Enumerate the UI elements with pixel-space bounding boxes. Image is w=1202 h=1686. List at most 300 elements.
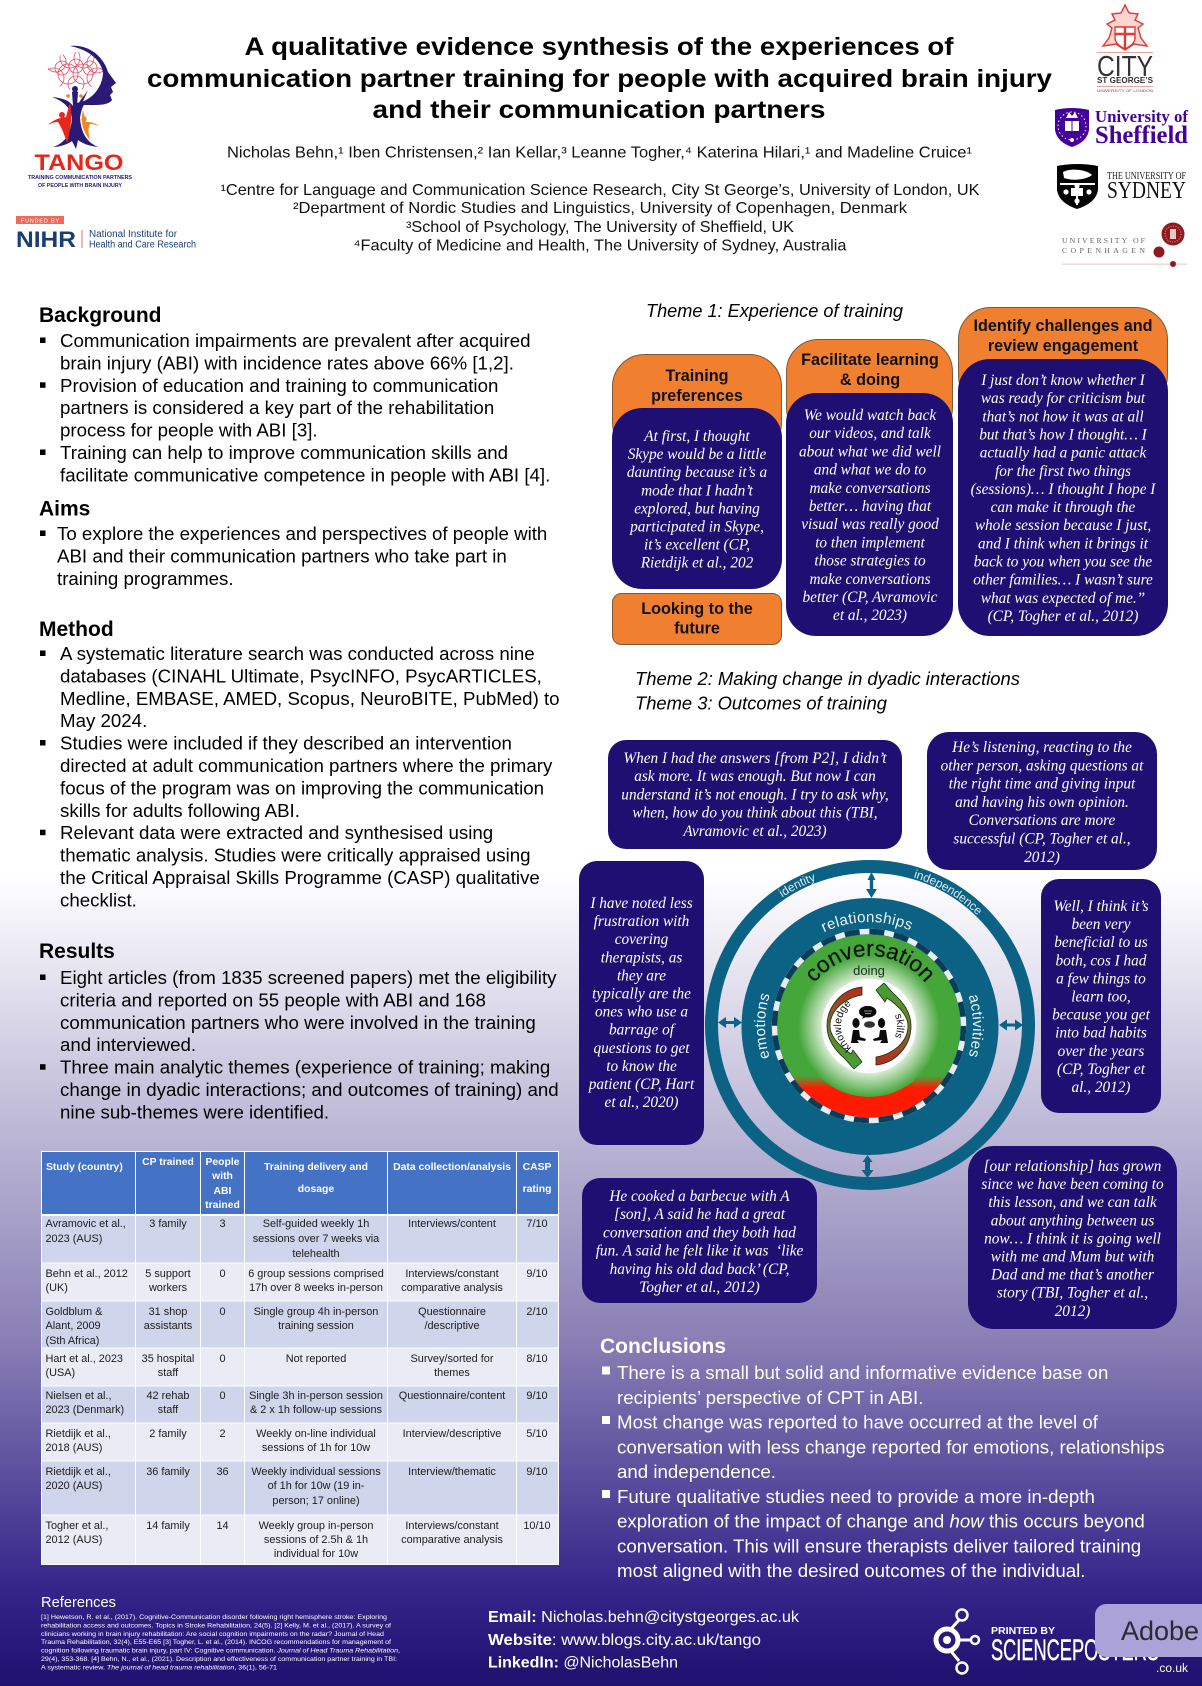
table row: Rietdijk 2020 (46, 1466, 548, 1507)
panel: training preferences: Rietdijk et al., 202 (640, 555, 754, 572)
quote: Togher CP beneficial: (CP, Togher et (1057, 1061, 1146, 1078)
table row: Avramovic: 3 (219, 1218, 226, 1230)
text block: results bullets: Three main analytic themes (experience of training; making (60, 1057, 550, 1078)
middle ring labels: relationships (822, 912, 912, 932)
table row: Behn: (UK) (46, 1282, 68, 1294)
text block: conclusions bullets: There is a small but solid and informative evidence base on (617, 1362, 1108, 1383)
logo: Science Posters: PRINTED BY (991, 1625, 1055, 1637)
table row: Rietdijk 2020: person; 17 online) (272, 1495, 360, 1507)
outer ring labels (778, 869, 981, 914)
title (147, 33, 1052, 124)
panel: identify challenges and review engagement: but that’s how I thought… I (979, 426, 1148, 444)
text block: method bullets: the Critical Appraisal Skills Programme (CASP) qualitative (60, 867, 540, 888)
table row: Avramovic: 7/10 (526, 1218, 548, 1230)
panel: training preferences: explored, but having (634, 500, 760, 517)
table row: Togher: individual for 10w (274, 1548, 358, 1560)
table row: Behn: workers (148, 1282, 188, 1294)
quote: Hart CP: patient (CP, Hart (588, 1076, 695, 1093)
table row: Behn: 5 support (145, 1268, 191, 1280)
table row: Hart: 35 hospital (142, 1353, 194, 1365)
references: 29(4), 353-368. [4] Behn, N., et al., (2021). Description and effectiveness of communication partner training in TBI: (41, 1656, 397, 1663)
conversation disc (778, 934, 960, 1118)
panel: identify challenges and review engagement: I just don’t know whether I (980, 372, 1146, 389)
quote: Togher TBI relationship: this lesson, and we can talk (988, 1194, 1158, 1211)
table row: Nielsen: & 2 x 1h follow-up sessions (250, 1404, 383, 1416)
text block: results bullets: change in dyadic interactions; and outcomes of training) and (60, 1079, 559, 1100)
logo: NIHR funding: FUNDED BY (21, 218, 59, 224)
table row: Hart (46, 1353, 548, 1379)
table row: Goldblum: 2/10 (526, 1306, 548, 1318)
text block: background bullets: partners is considered a key part of the rehabilitation (60, 397, 494, 418)
conversation label: conversation (808, 944, 932, 982)
text block: conclusions bullets: and independence. (617, 1461, 776, 1482)
authors: Nicholas Behn,¹ Iben Christensen,² Ian Kellar,³ Leanne Togher,⁴ Katerina Hilari,¹ and Madeline Cruice¹ (227, 144, 972, 162)
table header row: with (211, 1171, 233, 1182)
contact details: Website : www.blogs.city.ac.uk/tango (488, 1632, 761, 1649)
panel: identify challenges and review engagement: (CP, Togher et al., 2012) (988, 608, 1138, 625)
table row: Hart: Survey/sorted for (411, 1353, 494, 1365)
quote: Avramovic TBI: When I had the answers [from P2], I didn’t (623, 750, 887, 767)
text block: results bullets: Eight articles (from 1835 screened papers) met the eligibility (60, 967, 557, 988)
quote: Togher CP listening: Conversations are more (969, 812, 1116, 829)
quote: Togher CP barbecue: Togher et al., 2012) (639, 1279, 760, 1296)
text block: method bullets: focus of the program was on improving the communication (60, 777, 544, 798)
text block: method bullets: databases (CINAHL Ultimate, PsycINFO, PsycARTICLES, (60, 665, 542, 686)
table row: Avramovic (46, 1218, 548, 1260)
logo: NIHR funding: NIHR (16, 227, 76, 252)
table row: Togher: 14 (216, 1520, 229, 1532)
middle ring labels: emotions (754, 994, 770, 1058)
panel: identify challenges and review engagement: for the first two things (995, 463, 1131, 480)
text block: results bullets (40, 967, 559, 1122)
text block: conclusions bullets: most aligned with the desired outcomes of the individual. (617, 1560, 1086, 1581)
affiliations: ⁴Faculty of Medicine and Health, The University of Sydney, Australia (354, 238, 847, 254)
table row: Behn: 0 (219, 1268, 226, 1280)
quote: Hart CP: I have noted less (589, 895, 693, 912)
table row: Togher: comparative analysis (401, 1534, 503, 1546)
panel: training preferences: mode that I hadn’t (641, 482, 754, 499)
table row: Rietdijk 2018: sessions of 1h for 10w (262, 1442, 370, 1454)
heading: results: Results (39, 940, 115, 963)
arrow: bottom outer connection (862, 1155, 874, 1178)
panel: training preferences: it’s excellent (CP, (644, 537, 750, 554)
table row: Rietdijk 2020: Interview/thematic (408, 1466, 496, 1478)
text block: method bullets: May 2024. (60, 710, 147, 731)
table row: Avramovic: Self-guided weekly 1h (263, 1218, 369, 1230)
table header row: dosage (298, 1184, 334, 1195)
logo: NIHR funding (16, 216, 196, 252)
icon: two people talking (851, 1006, 888, 1043)
panel: aims (39, 498, 547, 589)
panel: training preferences: daunting because it’s a (627, 464, 768, 481)
panel: identify challenges and review engagement: whole session because I just, (975, 517, 1151, 534)
text block: method bullets: Medline, EMBASE, AMED, Scopus, NeuroBITE, PubMed) to (60, 688, 560, 709)
arrow: top outer connection (866, 872, 877, 898)
overlay: Adobe tooltip: Adobe (1121, 1616, 1199, 1646)
table row: Nielsen: 9/10 (526, 1390, 548, 1402)
quote: Togher TBI relationship: about anything between us (991, 1212, 1154, 1229)
table row: Nielsen: Nielsen et al., (46, 1390, 111, 1402)
panel: facilitate learning and doing: those strategies to (814, 553, 926, 570)
panel: training preferences: Training (666, 367, 728, 385)
logo: University of Copenhagen (1062, 222, 1187, 267)
quote: Togher TBI relationship: Dad and me that’s another (990, 1267, 1154, 1284)
heading: themes 2 and 3: Theme 3: Outcomes of training (635, 694, 887, 714)
affiliations: ³School of Psychology, The University of Sheffield, UK (406, 219, 795, 236)
outer ring labels: identity (778, 874, 814, 897)
quote: Avramovic TBI (608, 740, 902, 849)
logo: NIHR funding: Health and Care Research (89, 240, 196, 250)
panel: facilitate learning and doing (786, 340, 953, 636)
references: [1] Hewetson, R. et al., (2017). Cognitive-Communication disorder following right hemisphere stroke: Exploring (41, 1614, 387, 1621)
panel: identify challenges and review engagement: that’s not how it was at all (982, 408, 1144, 425)
text block: conclusions bullets: recipients’ perspective of CPT in ABI. (617, 1387, 923, 1408)
table row: Rietdijk 2020: 2020 (AUS) (46, 1480, 102, 1492)
contact details (488, 1609, 799, 1672)
panel: facilitate learning and doing: better (CP, Avramovic (803, 589, 938, 606)
contact details: LinkedIn: @NicholasBehn (488, 1654, 678, 1672)
table row: Goldblum (46, 1306, 548, 1347)
logo: City St George's: UNIVERSITY OF LONDON (1097, 88, 1153, 93)
table row: Togher: sessions of 2.5h & 1h (264, 1534, 368, 1546)
quote: Togher TBI relationship: 2012) (1055, 1303, 1090, 1320)
heading: method: Method (39, 618, 114, 641)
text block: background bullets: process for people with ABI [3]. (60, 420, 318, 441)
table row: Hart: 0 (219, 1353, 226, 1365)
middle disc (742, 898, 998, 1155)
panel: identify challenges and review engagement: back to you when you see the (974, 554, 1152, 570)
text block: conclusions bullets: Future qualitative studies need to provide a more in-depth (617, 1486, 1095, 1507)
panel: facilitate learning and doing: to then implement (815, 534, 926, 551)
quote: Togher TBI relationship: since we have been coming to (981, 1176, 1164, 1193)
table row: Togher (46, 1520, 551, 1560)
heading: conclusions: Conclusions (600, 1335, 726, 1358)
quote: Togher CP listening (927, 732, 1157, 870)
table row: Nielsen: 42 rehab (146, 1390, 190, 1402)
logo: University of Sydney: SYDNEY (1107, 178, 1186, 204)
table row: Goldblum: (Sth Africa) (46, 1335, 99, 1347)
table row: Nielsen: staff (158, 1404, 179, 1416)
table row: Rietdijk 2020: Rietdijk et al., (46, 1466, 111, 1478)
quote: Hart CP: they are (617, 967, 666, 984)
panel: facilitate learning and doing: and what we do to (814, 462, 926, 479)
quote: Togher CP beneficial: Well, I think it’s (1053, 898, 1149, 915)
table row: Nielsen: Questionnaire/content (399, 1390, 505, 1402)
quote: Avramovic TBI: ask more. It was enough. But now I can (634, 768, 876, 785)
table row: Goldblum: Goldblum & (46, 1306, 103, 1318)
table header row: rating (523, 1184, 551, 1195)
quote: Togher CP beneficial: because you get (1052, 1007, 1151, 1024)
quote: Hart CP: to know the (606, 1058, 677, 1075)
table row: Togher: Togher et al., (46, 1520, 108, 1532)
knowledge and skills labels: knowledge (833, 1001, 851, 1053)
quote: Togher CP beneficial: over the years (1058, 1043, 1144, 1060)
quote: Togher CP beneficial: a few things to (1056, 970, 1146, 987)
logo: University of Sydney: THE UNIVERSITY OF (1107, 171, 1186, 182)
affiliations: ²Department of Nordic Studies and Linguistics, University of Copenhagen, Denmark (293, 200, 907, 217)
text block: conclusions bullets: conversation with less change reported for emotions, relationships (617, 1436, 1164, 1457)
text block: conclusions bullets: conversation. This will ensure therapists deliver tailored training (617, 1535, 1141, 1556)
doing label: doing (853, 963, 885, 978)
table row: Avramovic: 2023 (AUS) (46, 1233, 102, 1245)
text block: method bullets (40, 643, 560, 910)
references: rehabilitation access and outcomes. Topics in Stroke Rehabilitation, 24(5). [2] Kelly, M. et al., (2017). A survey of (41, 1622, 391, 1629)
table row: Behn: Interviews/constant (405, 1268, 499, 1280)
logo: Science Posters (936, 1610, 1188, 1675)
panel: facilitate learning and doing: about what we did well (799, 443, 941, 460)
quote: Hart CP (579, 861, 704, 1145)
text block: results bullets: and interviewed. (60, 1034, 196, 1055)
outer ring labels: independence (914, 869, 981, 914)
panel: training preferences: Skype would be a little (628, 446, 766, 463)
quote: Togher CP beneficial: learn too, (1071, 988, 1131, 1006)
title: and their communication partners (372, 96, 826, 124)
quote: Togher CP listening: He’s listening, reacting to the (951, 739, 1132, 756)
table row: Rietdijk 2020: 36 (216, 1466, 229, 1478)
table row: Behn: 17h over 8 weeks in-person (249, 1282, 383, 1294)
table row: Behn: 9/10 (526, 1268, 548, 1280)
table row: Rietdijk 2018: Rietdijk et al., (46, 1428, 111, 1440)
panel: facilitate learning and doing: & doing (840, 371, 900, 389)
table header row: Data collection/analysis (393, 1162, 511, 1173)
panel: conclusions (600, 1335, 1164, 1581)
text block: method bullets: A systematic literature search was conducted across nine (60, 643, 535, 664)
logo: TANGO: TRAINING COMMUNICATION PARTNERS (28, 175, 133, 181)
table row: Goldblum: /descriptive (424, 1320, 480, 1332)
table row: Togher: Weekly group in-person (259, 1520, 373, 1532)
quote: Togher CP barbecue: fun. A said he felt like it was ‘like (596, 1243, 804, 1260)
logo: City St George's (1097, 5, 1153, 93)
panel: method (39, 618, 560, 910)
panel: identify challenges and review engagement: what was expected of me.” (981, 590, 1145, 607)
panel: facilitate learning and doing: visual was really good (801, 516, 939, 533)
quote: Togher CP beneficial (1041, 879, 1161, 1113)
table row: Hart: staff (158, 1367, 179, 1379)
affiliations (220, 182, 980, 254)
table row: Hart: themes (434, 1367, 470, 1379)
table row: Togher: 10/10 (523, 1520, 551, 1532)
text block: aims bullets (40, 523, 547, 589)
overlay: Adobe tooltip (1095, 1604, 1202, 1657)
logo: TANGO (28, 46, 133, 189)
table row: Goldblum: assistants (144, 1320, 193, 1332)
quote: Togher CP beneficial: into bad habits (1055, 1025, 1147, 1042)
logo: University of Sheffield: Sheffield (1095, 122, 1188, 149)
text block: conclusions bullets: exploration of the impact of change and how this occurs beyond (617, 1511, 1145, 1532)
panel: identify challenges and review engagement: Identify challenges and (973, 317, 1153, 335)
text block: background bullets: Training can help to improve communication skills and (60, 442, 508, 463)
table row: Rietdijk 2018: 2018 (AUS) (46, 1442, 102, 1454)
logo: TANGO: OF PEOPLE WITH BRAIN INJURY (38, 183, 123, 189)
table row: Rietdijk 2020: of 1h for 10w (19 in- (268, 1480, 365, 1492)
text block: background bullets: brain injury (ABI) with incidence rates above 66% [1,2]. (60, 352, 514, 373)
table row: Hart: Hart et al., 2023 (46, 1353, 123, 1365)
quote: Hart CP: barrage of (609, 1022, 677, 1039)
references: cognition following traumatic brain injury, part IV: Cognitive communication. Journal of Head Trauma Rehabilitation , (41, 1648, 400, 1655)
text block: method bullets: checklist. (60, 889, 137, 910)
logo: University of Copenhagen: UNIVERSITY OF (1062, 236, 1146, 245)
panel: facilitate learning and doing: better… having that (809, 498, 932, 515)
logo: TANGO: TANGO (34, 150, 124, 175)
table row: Avramovic: Avramovic et al., (46, 1218, 126, 1230)
table row: Goldblum: training session (278, 1320, 354, 1332)
quote: Togher CP barbecue: having his old dad back’ (CP, (610, 1261, 789, 1278)
logo: City St George's: ST GEORGE’S (1097, 75, 1153, 85)
text block: background bullets (40, 330, 550, 485)
quote: Togher CP barbecue (582, 1178, 817, 1303)
quote: Togher CP listening: successful (CP, Togher et al., (953, 830, 1131, 848)
table row: Rietdijk 2018: Interview/descriptive (403, 1428, 501, 1440)
logo: NIHR funding: National Institute for (89, 229, 178, 240)
quote: Togher CP beneficial: al., 2012) (1071, 1079, 1131, 1096)
quote: Hart CP: questions to get (593, 1040, 690, 1057)
table row: Goldblum: Alant, 2009 (46, 1320, 101, 1332)
text block: method bullets: Studies were included if they described an intervention (60, 733, 512, 754)
quote: Togher TBI relationship (968, 1146, 1177, 1329)
table row: Goldblum: 31 shop (149, 1306, 187, 1318)
dashed inner boundary (774, 932, 964, 1120)
quote: Togher CP beneficial: both, cos I had (1056, 952, 1147, 969)
panel: identify challenges and review engagement: was ready for criticism but (981, 390, 1146, 407)
quote: Togher TBI relationship: now… I think it is going well (984, 1230, 1161, 1247)
logo: Science Posters: .co.uk (1156, 1663, 1188, 1675)
quote: Hart CP: typically are the (592, 986, 691, 1002)
icon: skills arrow (876, 983, 911, 1065)
quote: Togher CP beneficial: beneficial to us (1054, 934, 1148, 951)
panel: looking to the future: future (674, 620, 720, 638)
quote: Togher CP listening: the right time and giving input (949, 776, 1136, 793)
table row: Avramovic: telehealth (292, 1248, 340, 1260)
panel: identify challenges and review engagement: actually had a panic attack (980, 445, 1147, 462)
middle ring labels: activities (969, 995, 984, 1057)
knowledge and skills labels: skills (895, 1014, 905, 1038)
table header row (46, 1157, 552, 1211)
panel: identify challenges and review engagement: and I think when it brings it (978, 535, 1149, 552)
text block: aims bullets: To explore the experiences and perspectives of people with (57, 523, 547, 544)
panel: facilitate learning and doing: make conversations (809, 480, 931, 497)
quote: Togher CP beneficial: been very (1071, 916, 1131, 933)
table row: Rietdijk 2018: 2 (219, 1428, 226, 1440)
panel: facilitate learning and doing: We would watch back (804, 407, 937, 424)
table row: Togher: 14 family (146, 1520, 190, 1532)
text block: method bullets: thematic analysis. Studies were critically appraised using (60, 845, 531, 866)
table row: Rietdijk 2018: 5/10 (526, 1428, 548, 1440)
logo: University of Sydney (1057, 164, 1186, 209)
references: Trauma Rehabilitation, 32(4), E55-E65 [3] Togher, L. et al., (2014). INCOG recommendations for management of (41, 1639, 391, 1646)
table row: Nielsen: 2023 (Denmark) (46, 1404, 124, 1416)
references (41, 1594, 400, 1671)
quote: Hart CP: ones who use a (595, 1004, 688, 1021)
table row: Avramovic: 3 family (149, 1218, 187, 1230)
text block: conclusions bullets: Most change was reported to have occurred at the level of (617, 1412, 1099, 1433)
quote: Hart CP: therapists, as (601, 949, 682, 966)
panel: identify challenges and review engagement: (sessions)… I thought I hope I (971, 481, 1156, 498)
heading: themes 2 and 3: Theme 2: Making change in dyadic interactions (635, 669, 1020, 689)
table row: Hart: 8/10 (526, 1353, 548, 1365)
quote: Avramovic TBI: when, how do you think about this (TBI, (632, 805, 878, 822)
panel: results (39, 940, 559, 1122)
text block: background bullets: Communication impairments are prevalent after acquired (60, 330, 531, 351)
knowledge and skills labels (833, 1001, 905, 1053)
table row: Nielsen (46, 1390, 548, 1416)
title: A qualitative evidence synthesis of the experiences of (244, 33, 954, 61)
text block: method bullets: skills for adults following ABI. (60, 800, 300, 821)
text block: results bullets: nine sub-themes were identified. (60, 1102, 329, 1122)
logo: City St George's: CITY (1097, 51, 1153, 83)
text block: method bullets: Relevant data were extracted and synthesised using (60, 822, 493, 843)
table row: Hart: (USA) (46, 1367, 75, 1379)
quote: Hart CP: covering (615, 931, 669, 948)
table header row: People (205, 1157, 240, 1168)
panel: facilitate learning and doing: our videos, and talk (809, 425, 932, 442)
contact details: Email: Nicholas.behn@citystgeorges.ac.uk (488, 1609, 799, 1626)
table row: Togher: Interviews/constant (405, 1520, 499, 1532)
table row: Rietdijk 2020: 36 family (146, 1466, 190, 1478)
affiliations: ¹Centre for Language and Communication Science Research, City St George’s, University of London, UK (220, 182, 980, 199)
table header row: ABI (214, 1186, 232, 1197)
quote: Togher CP listening: and having his own opinion. (955, 794, 1129, 811)
inner glow disc (798, 955, 940, 1097)
table row: Goldblum: Single group 4h in-person (254, 1306, 378, 1318)
quote: Togher CP barbecue: [son], A said he had a great (614, 1206, 786, 1223)
table row: Behn: 6 group sessions comprised (248, 1268, 384, 1280)
text block: results bullets: communication partners who were involved in the training (60, 1012, 536, 1033)
table: included studies (41, 1151, 559, 1565)
heading: theme 1: Theme 1: Experience of training (646, 301, 903, 321)
panel: training preferences: participated in Skype, (629, 518, 764, 536)
quote: Hart CP: et al., 2020) (605, 1094, 678, 1111)
table row: Rietdijk 2018 (46, 1428, 548, 1454)
table row: Rietdijk 2020: 9/10 (526, 1466, 548, 1478)
table row: Rietdijk 2018: 2 family (149, 1428, 187, 1440)
quote: Togher CP barbecue: He cooked a barbecue with A (608, 1188, 790, 1205)
text block: conclusions bullets (602, 1362, 1164, 1581)
panel: training preferences (612, 354, 782, 589)
table row: Goldblum: Questionnaire (418, 1306, 486, 1318)
panel: facilitate learning and doing: et al., 2023) (833, 607, 907, 624)
panel: looking to the future: Looking to the (641, 600, 753, 618)
logo: University of Sheffield: University of (1095, 107, 1189, 126)
quote: Togher CP barbecue: conversation and they both had (603, 1224, 796, 1241)
text block: aims bullets: ABI and their communication partners who take part in (57, 545, 507, 566)
table row: Behn: comparative analysis (401, 1282, 503, 1294)
table row: Hart: Not reported (286, 1353, 346, 1365)
panel: identify challenges and review engagement: can make it through the (991, 499, 1136, 516)
table row: Nielsen: 0 (219, 1390, 226, 1402)
middle ring labels (754, 912, 984, 1058)
table row: Behn (46, 1268, 548, 1294)
table row: Behn: Behn et al., 2012 (46, 1268, 128, 1280)
panel: identify challenges and review engagement: review engagement (988, 337, 1139, 355)
diagram: concentric circles of change (705, 860, 1035, 1190)
table header row: Study (country) (46, 1162, 123, 1173)
references: References (41, 1594, 116, 1611)
quote: Hart CP: frustration with (594, 913, 690, 930)
table row: Togher: 2012 (AUS) (46, 1534, 102, 1546)
quote: Togher CP listening: other person, asking questions at (941, 757, 1144, 774)
table header row: Training delivery and (264, 1162, 368, 1173)
table row: Avramovic: Interviews/content (408, 1218, 496, 1230)
quote: Togher TBI relationship: with me and Mum but with (991, 1248, 1155, 1266)
table row: Rietdijk 2020: Weekly individual sessions (251, 1466, 381, 1478)
table header row: CP trained (142, 1157, 194, 1168)
title: communication partner training for people with acquired brain injury (147, 65, 1052, 93)
heading: background: Background (39, 304, 162, 327)
arrow: left outer connection (718, 1017, 742, 1028)
panel: identify challenges and review engagement: other families… I wasn’t sure (973, 572, 1153, 589)
panel: training preferences: preferences (651, 387, 743, 405)
icon: knowledge arrow (827, 987, 862, 1069)
